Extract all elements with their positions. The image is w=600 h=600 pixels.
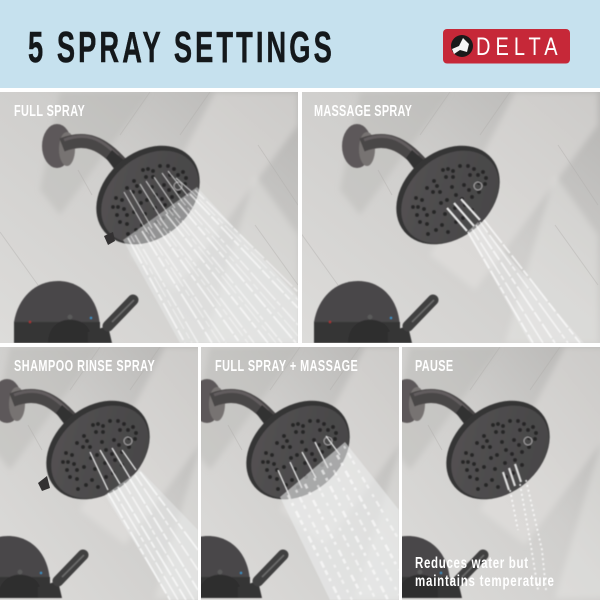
spray: shampoo rinse	[90, 448, 198, 600]
note: reduces water: Reduces water but	[415, 553, 528, 571]
note: maintains temperature: maintains temperature	[415, 571, 554, 589]
label: massage spray: MASSAGE SPRAY	[314, 102, 412, 120]
icon: spray pin	[38, 476, 50, 491]
spray: full	[123, 171, 298, 343]
label: pause: PAUSE	[415, 357, 453, 375]
label: full spray: FULL SPRAY	[14, 102, 85, 120]
panel: shampoo rinse spray	[0, 347, 198, 600]
logo: Delta	[443, 29, 570, 64]
label: shampoo rinse spray: SHAMPOO RINSE SPRAY	[14, 357, 155, 375]
panel: massage spray	[302, 92, 600, 343]
header band	[0, 0, 600, 88]
logo: Delta: DELTA	[476, 33, 558, 61]
panel: full spray + massage	[201, 347, 399, 600]
panel: pause	[402, 347, 600, 600]
spray: massage	[447, 199, 584, 343]
panel: full spray	[0, 92, 298, 343]
spray: pause trickle	[503, 464, 546, 590]
label: full spray + massage: FULL SPRAY + MASSAGE	[215, 357, 358, 375]
title: 5 SPRAY SETTINGS	[28, 22, 332, 72]
spray: full plus massage	[278, 436, 399, 600]
